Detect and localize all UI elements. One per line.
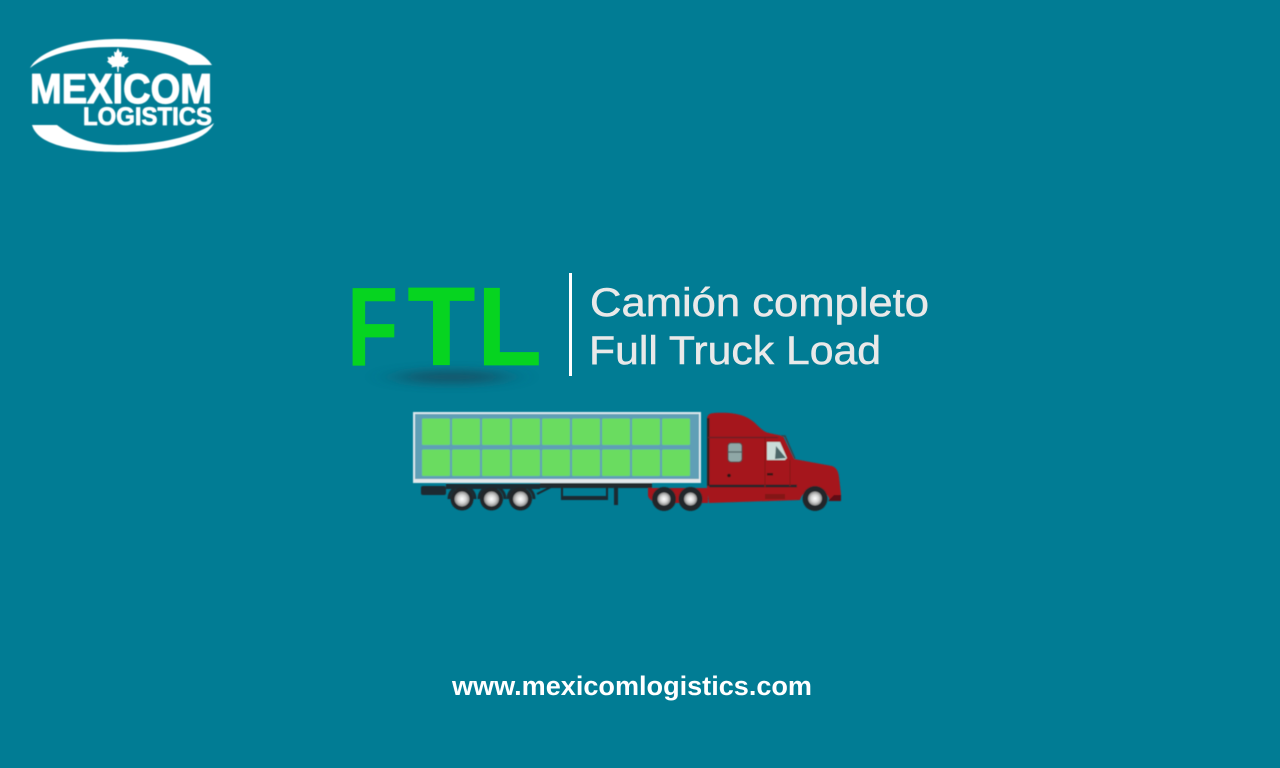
- subtitle line 1: Camión completo: [590, 281, 929, 325]
- truck chassis: [648, 488, 708, 503]
- trailer wheels: [450, 488, 532, 510]
- FTL heading: T: [408, 265, 475, 389]
- trailer cargo box: [414, 413, 700, 482]
- subtitle: Spanish and English: [589, 281, 929, 373]
- logo maple leaf: [107, 48, 129, 72]
- logo: Mexicom Logistics: [30, 39, 214, 152]
- vertical divider: [569, 273, 572, 376]
- logo wordmark MEXICOM: MEXICOM: [30, 65, 212, 112]
- logo bottom swoosh: [32, 123, 214, 152]
- tractor wheels: [652, 486, 828, 511]
- logo wordmark LOGISTICS: LOGISTICS: [83, 103, 212, 131]
- subtitle line 2: Full Truck Load: [589, 329, 881, 373]
- cargo pallets, full load: [422, 418, 690, 476]
- trailer undercarriage: [421, 483, 652, 505]
- website URL: www.mexicomlogistics.com: [451, 671, 812, 701]
- logo top swoosh: [30, 39, 212, 68]
- truck illustration: [414, 413, 841, 511]
- cab details: [707, 418, 841, 501]
- FTL heading: F: [347, 264, 398, 389]
- FTL heading: L: [477, 265, 542, 389]
- FTL heading: [347, 264, 542, 389]
- FTL heading shadow: [396, 370, 508, 384]
- truck cab: [707, 413, 841, 503]
